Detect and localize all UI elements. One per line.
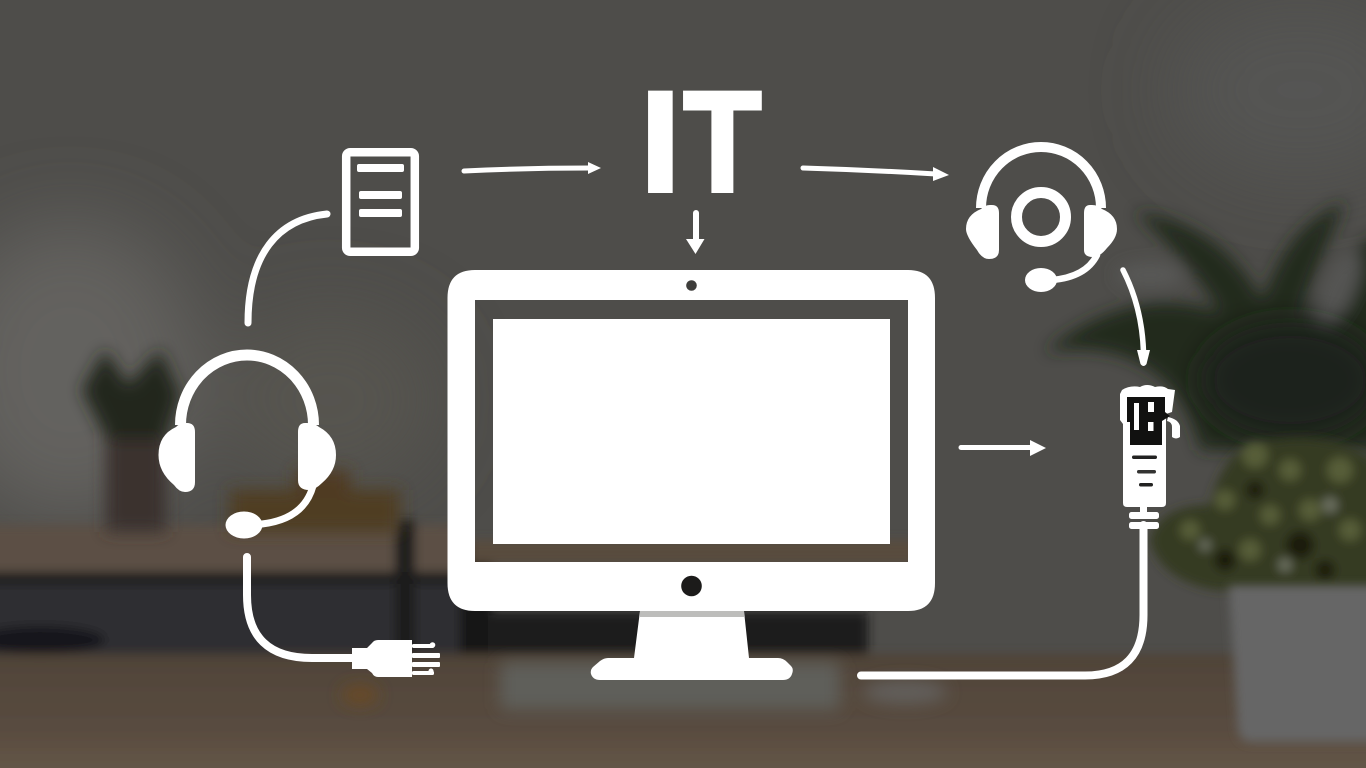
icon: monitor (448, 270, 935, 680)
pot (1229, 586, 1366, 742)
connector: document to left headset (248, 214, 327, 323)
title: IT: I (640, 63, 680, 222)
icon: document (346, 152, 415, 252)
arrow: IT down to monitor (686, 213, 704, 254)
icon: right headset (966, 147, 1117, 292)
monitor stand (591, 611, 793, 680)
icon: ethernet plug with cable (861, 385, 1180, 676)
cable: plug to monitor base (861, 525, 1144, 676)
right bush (1150, 438, 1366, 590)
left plant (82, 350, 180, 445)
title: IT (640, 63, 761, 222)
monitor frame (448, 270, 935, 611)
arrow: document to IT (464, 162, 601, 174)
orange items (230, 490, 400, 532)
icon: power plug with cable (247, 557, 440, 677)
power button (681, 576, 702, 596)
right palm (1045, 202, 1366, 450)
arrow: IT to right headset (803, 167, 949, 181)
arrow: right headset to ethernet plug (1123, 270, 1150, 366)
webcam (686, 280, 697, 291)
title: IT: T (683, 63, 761, 222)
icon: left headset (158, 355, 336, 538)
arrow: monitor to ethernet plug (961, 440, 1046, 456)
monitor screen (493, 319, 890, 544)
